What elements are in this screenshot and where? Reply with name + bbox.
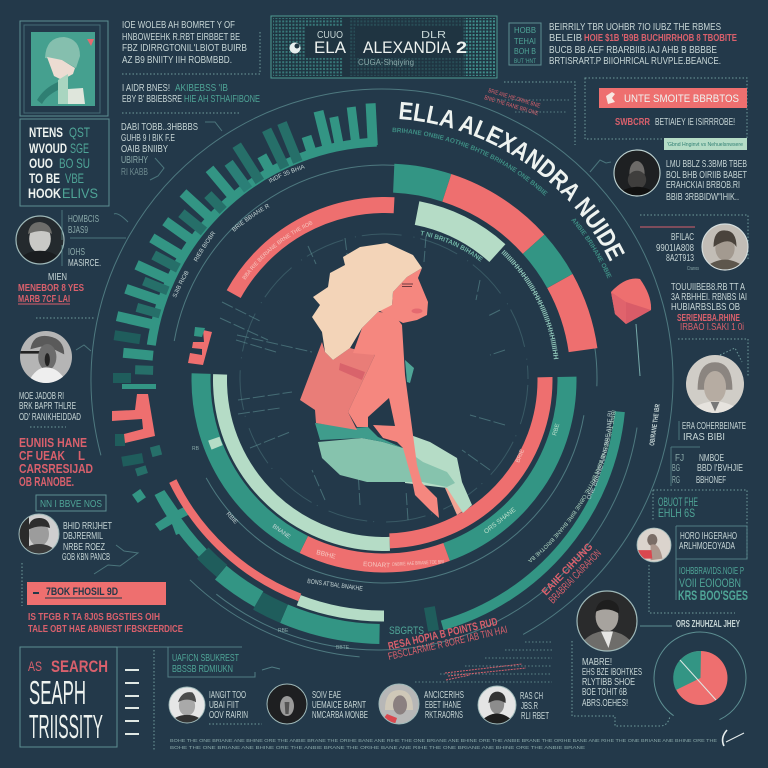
panel: search box: [20, 647, 154, 750]
panel: coral banner: 7BOK FHOSIL 9D: [46, 586, 118, 598]
label box: NN I BBVE NOS: [40, 498, 102, 510]
text: bottom row 2: UEMAICE BARNT: [312, 699, 366, 711]
label box: [36, 495, 106, 511]
panel: headline box: TO BE: [29, 170, 60, 186]
small labels on bands: BONS AT'BAL BNAKHE: [307, 578, 364, 593]
text block: intro: FBZ IDIRRGTONIL'LBIOT BUIRB: [122, 42, 247, 54]
small labels on bands: EONART: [363, 561, 390, 569]
small teal box: HOBB: [514, 26, 536, 35]
curved micro labels: IBBIE THE RIOHNE BBAN BRITHE OBNIE BIRE BHANE BRIOTHE BANOE RIB BRIHE: [528, 410, 616, 562]
text block: lower right: MABRE!: [582, 656, 612, 668]
pie chart with label: [572, 614, 764, 742]
text block: subheading: EBY B' BBIEBSRE: [122, 93, 182, 105]
small teal box: TEHAI: [514, 37, 536, 46]
panel: coral callout: [494, 78, 747, 145]
callout: slanted bottom label: [387, 616, 509, 663]
photo: bottom row 2: [267, 684, 307, 724]
text: bottom row 3: RKT.RAORNS: [425, 709, 463, 721]
panel: portrait: [20, 21, 108, 116]
shoulder, arm and hand: [348, 312, 439, 518]
panel: headline box: SGE: [70, 140, 89, 156]
panel: coral callout: SWBCRR: [615, 116, 650, 128]
panel: top banner: [271, 16, 497, 78]
photo: bottom row 3: [379, 684, 419, 724]
small labels on bands: ONBRIE HAE BRIANE TOE BRI: [392, 559, 444, 568]
text block: person 3: BHID RRIJHET: [63, 520, 112, 532]
ring chart: lower rings: [139, 135, 629, 625]
callout: coral heading: CARSRESIJAD: [19, 461, 93, 476]
small teal box: [509, 23, 541, 65]
panel: coral banner: IS TFGB R TA 8J0S BGSTIES OIH: [28, 611, 160, 623]
text block: top right: [549, 21, 737, 67]
text: bottom row 3: [424, 689, 464, 721]
text block: right stats: BBD I'BVHJIE: [697, 462, 743, 474]
text block: right person 1: BBIB 3RBBIDW"IHIK..: [666, 191, 739, 203]
text block: left list: RI KABB: [121, 166, 148, 178]
coral micro lines near title: [483, 88, 541, 117]
panel: coral banner: [22, 563, 183, 635]
icon: banner dot: [290, 42, 300, 54]
text block: person 3: NRBE ROEZ: [63, 541, 105, 553]
callout: slanted bottom label: FBSCLARMIE R 8ORE IAB TIN HAI: [387, 624, 509, 663]
text block: intro: [122, 19, 260, 74]
text: bottom row 4: [520, 690, 549, 722]
text block: right person 2: [640, 215, 748, 272]
callout: slanted bottom label: SBGRTS: [389, 625, 424, 637]
callout: coral heading: CF UEAK: [19, 448, 65, 463]
skirt: light layer: [405, 433, 472, 513]
footer fine print: BOHE THE ONE BRIANE ANE BHINE ORE THE ANBIE BRANE THE ORIHE BANE ANE RIHE THE ONE BRIANE ANE BHINE ORE THE ANBIE BRANE THE ORIHE BANE ANE RIHE THE ONE BRIANE ANE BHINE ORE THE: [170, 738, 717, 743]
text: bottom row 3: ANCICERIHS: [424, 689, 464, 701]
panel: top banner: CUGA-Shqiying: [358, 58, 414, 67]
photo: bottom row 1: [169, 687, 205, 723]
panel: top banner: CUUO: [317, 29, 343, 41]
curved micro labels: T NI BRITAIN BIHANE: [420, 230, 483, 262]
text block: right stats: [671, 420, 746, 486]
text block: person 3: DBJRERMIL: [63, 530, 103, 542]
text block: person 3: GOB KBN PANCB: [62, 551, 110, 563]
text: bottom row 2: [312, 689, 368, 721]
skirt: waistband: [315, 423, 403, 448]
small labels on bands: RB: [192, 446, 200, 452]
text block: person 2: [19, 345, 91, 427]
text block: left list: [121, 121, 222, 180]
text block: right stats: IRAS BIBI: [683, 431, 725, 443]
panel: right quote: [649, 526, 748, 613]
text: bottom row 2: NMCARBA MONBE: [312, 709, 368, 721]
small labels on bands: RBIE: [225, 511, 238, 526]
text: bottom row 1: OOV RAIRIN: [209, 709, 248, 721]
panel: teal stat: OBUOT FHE: [658, 495, 698, 509]
icon: coral pie fragment: [611, 279, 651, 376]
text block: person 2: MOE JADOB RI: [19, 390, 64, 402]
text block: left list: UBIRHY: [121, 154, 148, 166]
curved micro labels: ONE BBIHNE ARHE BRE ANIE RIHE: [587, 411, 612, 500]
text block: person 1: HOMBCIS: [68, 213, 99, 225]
text block: person 2: BRK BAPR THLRE: [19, 400, 76, 412]
photo: dark bearded man: [614, 150, 660, 196]
curved micro labels: BBA RIE BERIANE BRNE THE IIOBGINE AT: [242, 221, 312, 280]
neck accent: [405, 360, 414, 383]
dotted and coral micro lines, lower centre: [415, 642, 552, 682]
text block: right stats: BBHONEF: [696, 474, 726, 486]
text block: top right: BUCB BB AEF RBARBIIB.IAJ AHB B BBBBE: [549, 44, 717, 56]
callout: coral heading: OB RANOBE.: [19, 474, 74, 489]
panel: teal stat: EHLH 6S: [658, 506, 695, 520]
text: bottom row 1: [209, 689, 262, 724]
photo: bottom row 4: [478, 686, 516, 724]
text: bottom row 3: EBET IHANE: [425, 699, 461, 711]
text block: intro: AZ B9 BNIITY IIH ROBMBBD.: [122, 54, 232, 66]
callout: coral heading: L: [78, 448, 85, 463]
small labels on bands: RBE: [278, 628, 289, 634]
panel: search box: SEARCH: [51, 657, 108, 676]
panel: coral banner: TALE OBT HAE ABNIEST IFBSKEERDICE: [28, 623, 183, 635]
panel: headline box: ELIVS: [62, 185, 98, 201]
text block: person 1: [18, 210, 128, 318]
text: bottom row 4: RAS CH: [520, 690, 543, 702]
panel: headline box: NTENS: [29, 124, 63, 140]
text: bottom row 1: UBAI FIIT: [209, 699, 239, 711]
photo: woman right: [702, 224, 748, 270]
text block: left list: GUHB 9 I BIK F.E: [121, 132, 175, 144]
figure: stylised seated woman: [300, 243, 472, 518]
small labels on bands: RBE: [552, 423, 561, 437]
vertical micro label: OBIRANE THE IBR: [649, 404, 662, 446]
text block: person 1: MIEN: [48, 271, 67, 283]
panel: headline box: OUO: [29, 155, 53, 171]
panel: coral callout: UNTE SMOITE BBRBTOS: [624, 93, 739, 105]
text block: intro: HNBOWEEHK R.RBT EIRBBET BE: [122, 31, 240, 43]
text block: lower right: EHS BZE IBOHTKES: [582, 666, 642, 678]
callout: slanted right label: BRABRIAI CAIRAHON: [547, 547, 604, 606]
text block: person 1: BJAS9: [68, 224, 88, 236]
panel: right quote: VOII EOIOOBN: [679, 576, 741, 590]
photo: man bottom-left: [19, 514, 59, 554]
text block: subheading: [122, 82, 260, 113]
panel: search box: TRIISSITY: [29, 708, 103, 745]
callout: slanted bottom label: RESA HOPIA B POINTS RUD: [387, 616, 499, 653]
text block: right stats: NMBOE: [699, 452, 724, 464]
photo: man top-left: [16, 216, 64, 264]
text block: right stats: FJ: [675, 452, 684, 464]
text block: right person 2: Cranos: [687, 266, 699, 272]
text block: person 1: MENEBOR 8 YES: [18, 282, 84, 294]
callout: slanted right label: EAIIE CIHUNG: [540, 541, 595, 598]
panel: headline box: [20, 119, 109, 206]
callout: teal label: [117, 647, 280, 677]
title: ELLA ALEXANDRA NUIDE: [399, 102, 625, 262]
panel: top banner: 2: [456, 38, 467, 57]
text block: person 1: MASIRCE.: [68, 257, 101, 269]
panel: headline box: VBE: [65, 170, 84, 186]
text block: right person 2: BFILAC: [671, 231, 694, 243]
ring chart: right teal band: [104, 118, 644, 658]
text block: lower right: ABRS.OEHES!: [582, 697, 628, 709]
panel: headline box: BO SU: [59, 155, 90, 171]
small teal box: BOH B: [514, 47, 536, 56]
photo: woman small: [637, 528, 671, 562]
lips: [412, 308, 422, 314]
text block: left list: OAIB BNIIBY: [121, 143, 168, 155]
curved micro labels: BRIHANE ONBIE AOTHIE BHTIE BRIHANE ONE BNBIE ANBIE BRANOHIE BIDBIE BRIA: [392, 128, 548, 196]
small labels on bands: BNANE: [271, 524, 291, 540]
panel: right quote: HORO IHGERAHO: [680, 530, 737, 542]
curved micro labels: SJIB RIOBNE: [172, 270, 188, 298]
skirt: mid layer: [318, 438, 455, 487]
small labels on bands: BBTE: [336, 645, 350, 651]
callout: coral heading: EUNIIS HANE: [19, 435, 87, 450]
text block: top right: BELEIB: [549, 32, 582, 44]
small labels on bands: [192, 423, 561, 651]
panel: right quote: ARLHMOEOYADA: [679, 540, 735, 552]
footer fine print: BOHE THE ONE BRIANE ANE BHINE ORE THE ANBIE BRANE THE ORIHE BANE ANE RIHE THE ONE BRIANE ANE BHINE ORE THE ANBIE BRANE: [170, 745, 585, 750]
panel: top banner: ALEXANDIA: [363, 38, 452, 57]
icon: swoosh mark: [723, 730, 744, 746]
coral gauge accents: [112, 327, 212, 443]
small labels on bands: BRIE: [515, 449, 526, 464]
callout: teal label: BBSSB RDMIUKN: [172, 663, 233, 675]
text block: right mid: HUBIARBSLBS OB: [671, 301, 740, 313]
back of torso: [300, 342, 375, 430]
text block: top right: BEIRRILY TBR UOHBR 7IO IUBZ THE RBMES: [549, 21, 721, 33]
text block: right stats: RG: [672, 474, 680, 486]
radial tick marks inside the ring: [220, 236, 505, 520]
text block: lower right: BOE TOHIT 6B: [582, 686, 627, 698]
strap accent: [339, 363, 365, 380]
text block: right mid: [671, 281, 748, 376]
panel: top banner: DLR: [421, 29, 446, 41]
portrait image: [31, 32, 95, 106]
radial gauge bars: [113, 103, 652, 645]
photo: suited man: [577, 591, 637, 651]
callout: coral heading: [19, 435, 93, 489]
mint tag: 'Gbnd Hnginvt vs Nehuelsnwsere: [667, 142, 743, 148]
text block: lower right: [582, 656, 642, 709]
curved micro labels: ANBIE BRIHANE OBIE RAO: [571, 218, 612, 278]
mint tag: [664, 138, 747, 150]
text block: right mid: IRBAO I.SAKI 1 0i: [680, 321, 744, 333]
photo: glasses person: [20, 331, 72, 383]
text block: subheading: AKIBEBSS 'IB: [175, 82, 228, 94]
panel: headline box: WVOUD: [29, 140, 67, 156]
text: bottom row 2: SOIV EAE: [312, 689, 341, 701]
text block: subheading: HIE AH STHAIFIBONE: [184, 93, 260, 105]
small labels on bands: ORS SHANE: [483, 506, 518, 536]
text block: left list: DABI TOBB..3HBBBS: [121, 121, 198, 133]
face: [378, 268, 428, 323]
hair: [312, 243, 422, 360]
panel: search box: SEAPH: [29, 674, 86, 711]
curved micro labels: [172, 128, 616, 562]
pie: [674, 651, 728, 705]
photo: older man right: [686, 355, 744, 413]
text: bottom row 4: RLI RBET: [521, 710, 549, 722]
text: bottom row 1: IANGIT TOO: [209, 689, 246, 701]
curved micro labels: INDF 35 BHIANE: [268, 164, 305, 183]
coral micro lines near title: BNIE THE RANE BRI ONE: [483, 95, 539, 117]
text block: subheading: I AIDR BNES!: [122, 82, 170, 94]
lower gauge fragments: [115, 384, 190, 535]
curved micro labels: BRIE BBIANE R6: [232, 204, 270, 232]
footer fine print: [170, 738, 717, 750]
panel: top banner: ELA: [314, 38, 347, 57]
text block: right person 2: 8A2T913: [666, 252, 694, 264]
coral bar: [599, 88, 747, 108]
curved micro labels: IIIIIIIIHHHHIIIIIIHHHHIIIIIIIHHHHIIIIIHHHIII: [501, 250, 558, 360]
small labels on bands: BBIHE: [316, 549, 337, 561]
coral micro lines near title: BRIE ANE HIE ORIHE BNIE: [487, 88, 541, 110]
text block: right stats: BG: [672, 462, 680, 474]
text block: person 1: MARB 7CF LAI: [18, 293, 70, 305]
text: bottom row 4: JBS.R: [521, 700, 538, 712]
callout: teal label: UAFICN SBUKREST: [172, 652, 239, 664]
eye: [402, 284, 413, 286]
text block: intro: IOE WOLEB AH BOMRET Y OF: [122, 19, 235, 31]
text block: right person 2: 9901IA808: [656, 242, 694, 254]
panel: headline box: HOOK: [28, 185, 61, 201]
panel: headline box: QST: [69, 124, 90, 140]
text block: lower right: RLYTIBB SHOE: [582, 676, 635, 688]
ring chart: top segments: [103, 96, 667, 660]
leg: back: [445, 488, 472, 515]
panel: teal stat: [653, 490, 747, 560]
text block: person 1: IOHS: [68, 246, 85, 258]
text block: person 3: [62, 520, 138, 574]
text block: top right: BRTISRART.P BIIOHRICAL RUVPLE.BEANCE.: [549, 55, 721, 67]
text block: right person 1: [590, 158, 747, 203]
curved micro labels: RIEB BIOBR: [194, 232, 216, 262]
text block: person 2: OD' RANIKHEIDDAD: [19, 411, 81, 423]
panel: search box: AS: [28, 658, 42, 674]
small teal box: BUT 'HNT: [514, 59, 536, 65]
